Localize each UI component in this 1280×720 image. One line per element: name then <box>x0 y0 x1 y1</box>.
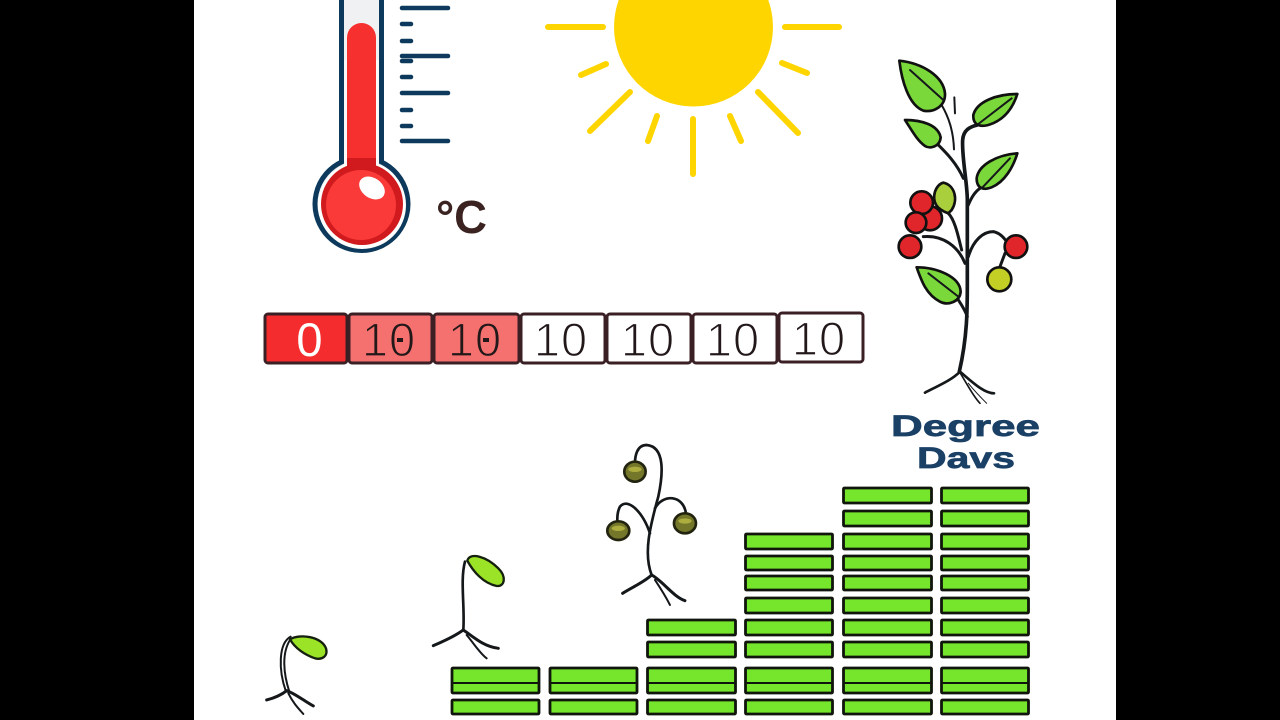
icon: thermometer <box>315 0 448 250</box>
cell: 10 white 3 <box>693 313 777 366</box>
cell: 10 white 1 <box>521 313 605 366</box>
heading: Degree Days: Davs <box>917 442 1015 475</box>
seedling stage 3 with buds <box>607 445 696 605</box>
heading: Degree Days <box>891 410 1040 475</box>
cell: 0 <box>265 313 347 366</box>
cell: 10 white 2 <box>607 313 691 366</box>
thermometer scale ticks <box>402 8 448 141</box>
cell: 10 light red 2 <box>434 313 519 366</box>
bar column 5 <box>843 488 932 714</box>
icon: mature fruiting plant <box>899 61 1027 403</box>
cell: 10 light red 1 <box>349 313 432 366</box>
daily degree-day value strip <box>265 312 863 366</box>
cell: 10 light red 2: 10 <box>448 313 502 366</box>
cell: 10 white 2: 10 <box>621 313 675 366</box>
cell: 10 light red 1: 10 <box>362 313 416 366</box>
seedling stage 1 <box>267 636 326 714</box>
cell: 0: 0 <box>296 313 324 366</box>
bar column 4 <box>745 534 833 714</box>
white page panel <box>194 0 1116 720</box>
cell: 10 white 4 <box>779 312 863 365</box>
bar chart: accumulated degree days <box>452 488 1029 714</box>
degree celsius label: °C <box>436 191 487 243</box>
icon: sun <box>548 0 839 174</box>
heading: Degree Days: Degree <box>891 410 1040 443</box>
bar column 6 <box>941 488 1029 714</box>
bar column 3 <box>647 620 736 714</box>
bar column 1 <box>452 668 539 714</box>
bar column 2 <box>550 668 637 714</box>
cell: 10 white 4: 10 <box>792 312 846 365</box>
cell: 10 white 1: 10 <box>534 313 588 366</box>
cell: 10 white 3: 10 <box>706 313 760 366</box>
seedling stage 2 <box>433 556 504 658</box>
